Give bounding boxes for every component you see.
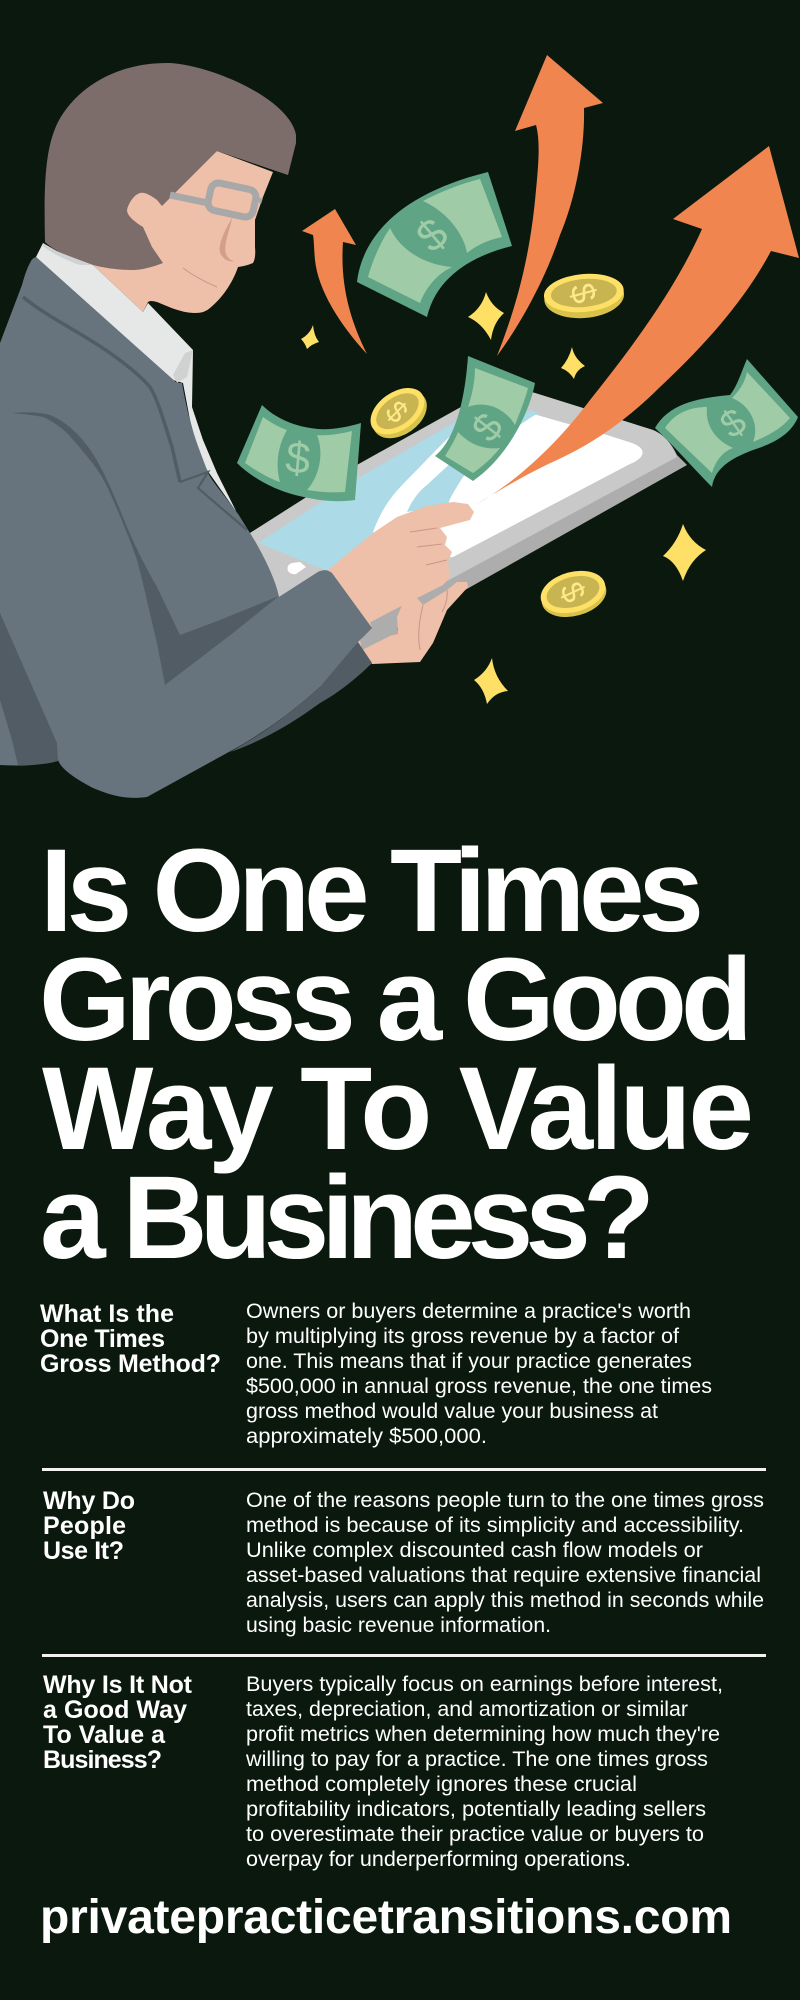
man: neck, face and ear	[93, 151, 273, 313]
heading: why is it not a good way: Why Is It Not	[43, 1671, 193, 1699]
text block: reasons for use: asset-based valuations that require extensive financial	[246, 1564, 761, 1587]
text block: reasons for use	[246, 1489, 764, 1637]
heading: why is it not a good way: To Value a	[43, 1721, 166, 1749]
heading: why do people use it	[43, 1487, 135, 1565]
man: suit jacket	[0, 257, 372, 798]
arrow: large orange	[475, 146, 799, 505]
bill: center: $	[464, 405, 512, 450]
heading: what is the one times gross method: Gross Method?	[40, 1350, 221, 1378]
text block: why it falls short: overpay for underperforming operations.	[246, 1848, 631, 1871]
text block: why it falls short: profit metrics when determining how much they're	[246, 1723, 720, 1746]
bill: center	[435, 356, 535, 481]
illustration: businessman with tablet and rising money	[0, 55, 799, 798]
arrow: middle orange	[497, 55, 603, 356]
footer website: privatepracticetransitions.com	[40, 1891, 732, 1944]
text block: why it falls short: Buyers typically focus on earnings before interest,	[246, 1673, 723, 1696]
bill: top: $	[407, 209, 457, 262]
bill: left	[237, 405, 361, 501]
tablet	[250, 390, 687, 648]
text block: reasons for use: method is because of its simplicity and accessibility.	[246, 1514, 744, 1537]
heading: why do people use it: People	[43, 1512, 126, 1540]
sparkle 1	[301, 325, 319, 349]
text block: why it falls short: method completely ignores these crucial	[246, 1773, 637, 1796]
title: Gross a Good	[39, 934, 753, 1066]
text block: reasons for use: Unlike complex discounted cash flow models or	[246, 1539, 703, 1562]
title: a Business?	[40, 1152, 655, 1284]
heading: why is it not a good way: Business?	[43, 1746, 162, 1774]
text block: reasons for use: One of the reasons people turn to the one times gross	[246, 1489, 764, 1512]
suit cuff underside	[335, 642, 372, 680]
heading: what is the one times gross method: What Is the	[40, 1300, 174, 1328]
hand: pointing finger on tablet	[328, 502, 474, 628]
panel: why is it not a good way	[43, 1671, 723, 1871]
title: Is One Times	[40, 825, 704, 957]
text block: method explanation: by multiplying its gross revenue by a factor of	[246, 1325, 679, 1348]
coin: lower right: $	[553, 576, 593, 608]
arrow: small orange	[302, 209, 367, 354]
coin: middle left	[362, 378, 436, 448]
man: glasses	[170, 182, 262, 218]
man: shirt and collar	[36, 243, 240, 517]
hand: lower fingers holding tablet	[356, 582, 468, 664]
bill: top	[357, 172, 512, 317]
text block: method explanation	[246, 1300, 712, 1448]
sparkle 4	[663, 524, 706, 581]
text block: why it falls short	[245, 1673, 723, 1871]
sparkle 3	[561, 347, 585, 379]
coin: middle left: $	[379, 395, 414, 430]
title	[39, 825, 754, 1284]
panel: what is the one times gross method	[40, 1300, 712, 1448]
panel: why do people use it	[43, 1487, 764, 1637]
heading: what is the one times gross method: One Times	[40, 1325, 165, 1353]
coin: top right	[542, 271, 626, 321]
heading: what is the one times gross method	[40, 1300, 221, 1378]
text block: method explanation: one. This means that if your practice generates	[246, 1350, 692, 1373]
bill: left: $	[284, 433, 312, 484]
bill: right	[655, 359, 798, 487]
text block: why it falls short: to overestimate their practice value or buyers to	[246, 1823, 704, 1846]
heading: why is it not a good way: a Good Way	[43, 1696, 187, 1724]
coin: top right: $	[562, 279, 604, 307]
heading: why do people use it: Use It?	[43, 1537, 124, 1565]
coin: lower right	[536, 564, 611, 624]
suit cuff	[279, 570, 372, 687]
text block: reasons for use: analysis, users can apply this method in seconds while	[246, 1589, 764, 1612]
text block: reasons for use: using basic revenue information.	[246, 1614, 551, 1637]
sparkle 5	[474, 658, 508, 704]
text block: why it falls short: taxes, depreciation, and amortization or similar	[246, 1698, 688, 1721]
sparkle 2	[468, 292, 504, 340]
title: Way To Value	[42, 1043, 754, 1175]
text block: method explanation: gross method would value your business at	[246, 1400, 658, 1423]
heading: why is it not a good way	[43, 1671, 193, 1774]
man: hair	[45, 63, 296, 270]
text block: why it falls short: profitability indicators, potentially leading sellers	[246, 1798, 706, 1821]
heading: why do people use it: Why Do	[43, 1487, 135, 1515]
bill: right: $	[713, 401, 754, 447]
text block: method explanation: $500,000 in annual gross revenue, the one times	[246, 1375, 712, 1398]
text block: method explanation: approximately $500,000.	[246, 1425, 487, 1448]
text block: why it falls short: willing to pay for a practice. The one times gross	[245, 1748, 708, 1771]
text block: method explanation: Owners or buyers determine a practice's worth	[246, 1300, 691, 1323]
